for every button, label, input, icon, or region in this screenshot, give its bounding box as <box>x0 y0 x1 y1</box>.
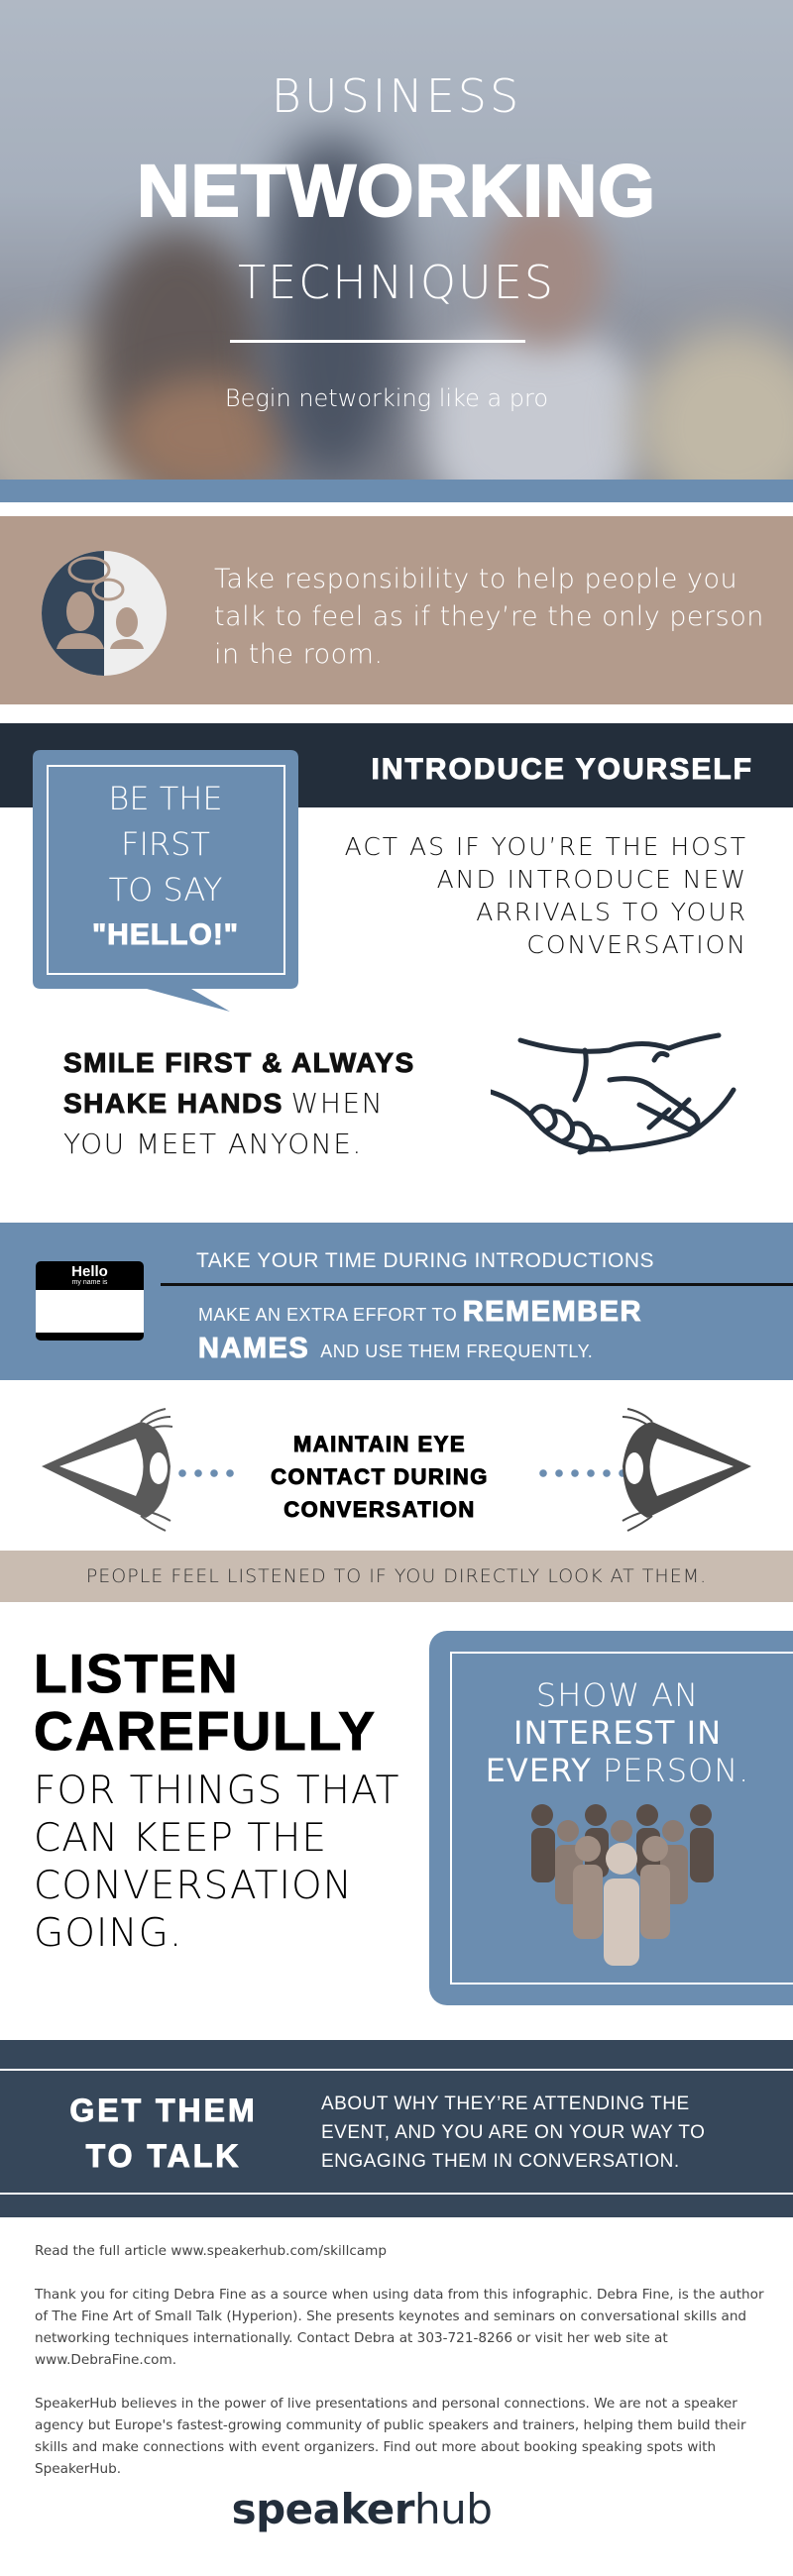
title: TECHNIQUES <box>238 256 555 309</box>
dots right <box>535 1469 626 1477</box>
title: BUSINESS <box>272 69 521 123</box>
band: people feel listened <box>0 1551 793 1602</box>
icon: name tag: my name is <box>72 1279 107 1286</box>
dots left <box>174 1469 234 1477</box>
icon: group of people <box>531 1804 714 1966</box>
panel: names band <box>0 1223 793 1380</box>
icon: name tag: Hello <box>71 1263 108 1280</box>
speech bubble: be the first: TO SAY <box>109 871 222 909</box>
heading band: introduce yourself <box>0 723 793 807</box>
text: smile first: SHAKE HANDS WHEN <box>63 1087 384 1120</box>
footer text: Thank you for citing Debra Fine as a source when using data from this infographic. Debra Fine, is the author of The Fine Art of Small Talk (Hyperion). She presents keynotes and seminars on conversational skills and networking techniques internationally. Contact Debra at 303-721-8266 or visit her web site at www.DebraFine.com. <box>35 2287 764 2368</box>
band: get them to talk <box>0 2040 793 2217</box>
text: maintain eye contact <box>271 1432 489 1522</box>
footer text: Read the full article www.speakerhub.com/skillcamp <box>35 2243 387 2259</box>
text: listen carefully: LISTEN <box>34 1643 240 1704</box>
band: people feel listened: PEOPLE FEEL LISTENED TO IF YOU DIRECTLY LOOK AT THEM. <box>86 1565 707 1587</box>
title <box>137 69 656 412</box>
panel: show an interest: SHOW AN <box>536 1676 699 1714</box>
title: Begin networking like a pro <box>225 384 548 412</box>
icon: two people talking <box>42 551 167 676</box>
speech bubble: be the first: BE THE <box>108 780 223 817</box>
logo: speakerhub: speakerhub <box>232 2485 492 2533</box>
footer text <box>34 2243 764 2477</box>
text: act as host: ACT AS IF YOU’RE THE HOST AND INTRODUCE NEW ARRIVALS TO YOUR CONVERSATION <box>345 832 747 959</box>
text: maintain eye contact: CONVERSATION <box>283 1497 476 1522</box>
text: listen carefully: FOR THINGS THAT CAN KEEP THE CONVERSATION GOING. <box>34 1769 399 1956</box>
text block: Take responsibility to help people you talk to feel as if they’re the only person in the room. <box>214 564 764 670</box>
text: maintain eye contact: MAINTAIN EYE <box>293 1432 466 1456</box>
band: get them to talk: TO TALK <box>86 2138 241 2174</box>
text: remember names: NAMES AND USE THEM FREQUENTLY. <box>198 1333 593 1364</box>
text: smile first <box>63 1047 415 1160</box>
text: smile first: YOU MEET ANYONE. <box>63 1127 363 1160</box>
text: remember names <box>198 1296 642 1364</box>
panel: responsibility <box>0 516 793 704</box>
panel: show an interest: EVERY PERSON. <box>486 1752 749 1789</box>
footer text: SpeakerHub believes in the power of live presentations and personal connections. We are not a speaker agency but Europe's fastest-growing community of public speakers and trainers, helping them build their skills and make connections with event organizers. Find out more about booking speaking spots with SpeakerHub. <box>35 2396 746 2477</box>
blue bar <box>0 480 793 502</box>
icon: left eye <box>42 1408 172 1532</box>
text: maintain eye contact: CONTACT DURING <box>271 1464 489 1489</box>
panel: show an interest: INTEREST IN <box>513 1714 722 1752</box>
band: get them to talk: GET THEM <box>69 2093 258 2128</box>
speech bubble: be the first <box>33 750 298 1012</box>
heading band: introduce yourself: INTRODUCE YOURSELF <box>372 753 753 786</box>
text: listen carefully <box>34 1643 399 1956</box>
icon: handshake <box>491 1032 736 1155</box>
speech bubble: be the first: FIRST <box>121 825 210 863</box>
text: smile first: SMILE FIRST & ALWAYS <box>63 1047 415 1078</box>
icon: right eye <box>623 1408 751 1532</box>
panel: show an interest <box>429 1631 793 2005</box>
text: remember names: MAKE AN EXTRA EFFORT TO REMEMBER <box>198 1296 642 1328</box>
text: listen carefully: CAREFULLY <box>34 1700 377 1762</box>
hero photo background <box>0 0 793 480</box>
title: NETWORKING <box>137 150 656 232</box>
text: take your time: TAKE YOUR TIME DURING INTRODUCTIONS <box>196 1249 654 1272</box>
icon: name tag <box>36 1261 144 1341</box>
band: get them to talk: ABOUT WHY THEY’RE ATTENDING THE EVENT, AND YOU ARE ON YOUR WAY TO ENGAGING THEM IN CONVERSATION. <box>321 2093 705 2172</box>
speech bubble: be the first: "HELLO!" <box>92 918 239 951</box>
